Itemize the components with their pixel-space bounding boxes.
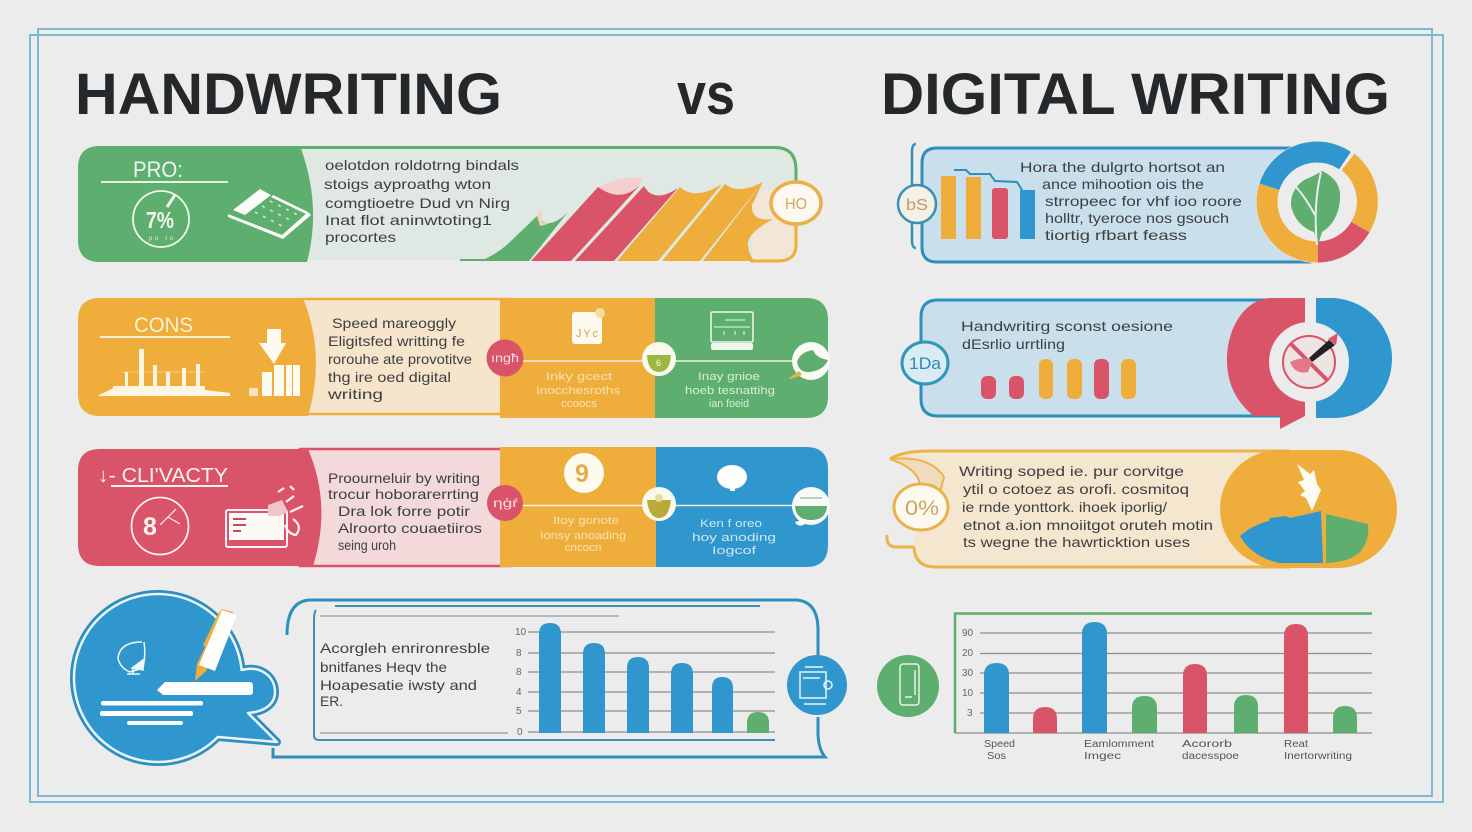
pros badge: HO xyxy=(785,196,807,213)
panel: pros xyxy=(78,146,821,262)
digital cons badge: 1Da xyxy=(909,354,942,373)
connector lines xyxy=(520,360,800,362)
panel: summary xyxy=(78,447,830,567)
grid lines xyxy=(955,633,1372,733)
cons light panel xyxy=(300,299,510,414)
bar chart xyxy=(515,623,775,738)
digital summary text xyxy=(959,463,1213,550)
bubble body xyxy=(74,594,277,762)
digital pros text: tiortig rfbart feass xyxy=(1045,227,1187,243)
digital summary text: ytil o cotoez as orofi. cosmitoq xyxy=(963,481,1189,497)
pros rule xyxy=(101,181,228,183)
summary red node: ηģŕ xyxy=(493,496,518,510)
pros outline xyxy=(300,148,796,190)
panel: cons xyxy=(78,298,830,418)
icon: number nine: 9 xyxy=(575,460,589,488)
digital cons text xyxy=(961,318,1173,352)
mini bars xyxy=(941,170,1035,239)
digital summary outline xyxy=(887,451,1290,567)
cons leaf node xyxy=(789,342,830,380)
chart text: bnitfanes Heqv the xyxy=(320,659,447,675)
summary blue caption: Ken f oreo xyxy=(700,518,762,530)
digital pros text: ance mihootion ois the xyxy=(1042,176,1204,192)
donut chart xyxy=(1256,141,1378,263)
digital summary text: ie rnde yonttork. ihoek iporlig/ xyxy=(962,499,1167,515)
pros text: procortes xyxy=(325,229,396,245)
icon: percent dial xyxy=(133,191,189,247)
blue half ring xyxy=(1316,298,1392,418)
cons text: rorouhe ate provotitve xyxy=(328,351,472,367)
summary orange block xyxy=(500,447,660,567)
cons orange caption: ccoocs xyxy=(561,398,598,410)
summary text: Proourneluir by writing xyxy=(328,470,480,486)
icon: note card xyxy=(572,308,605,344)
cons red node: ıngħ xyxy=(491,351,519,365)
summary cup node xyxy=(792,487,830,526)
digital summary text: ts wegne the hawrticktion uses xyxy=(963,534,1190,550)
digital cons text: Handwritirg sconst oesione xyxy=(961,318,1173,334)
pros text: stoigs ayproathg wton xyxy=(324,176,491,192)
icon: laptop xyxy=(711,312,753,350)
summary text: Alroorto couaetiiros xyxy=(338,520,482,536)
panel: digital cons xyxy=(902,298,1392,429)
summary orange caption xyxy=(540,515,626,554)
icon: note card: JYc xyxy=(576,328,598,340)
icon: lightbulb sketch xyxy=(118,642,145,674)
summary text xyxy=(328,470,482,553)
chart text: Acorgleh enrironresble xyxy=(320,640,490,656)
cons orange caption xyxy=(536,371,621,410)
cons mid node: 6 xyxy=(656,358,661,368)
icon: island and feather xyxy=(1240,464,1368,563)
pros text xyxy=(324,157,519,245)
cons green caption: Inay gnioe xyxy=(698,371,760,383)
icon: number nine xyxy=(564,453,604,493)
digital cons badge xyxy=(902,342,948,384)
connector lines xyxy=(520,504,800,506)
digital summary badge xyxy=(894,484,948,530)
bar chart: 5 xyxy=(516,706,522,717)
cons text: thg ire oed digital xyxy=(328,369,451,385)
category labels: Imgec xyxy=(1084,750,1121,762)
cons text: Speed mareoggly xyxy=(332,315,456,331)
bar chart: 4 xyxy=(516,687,522,698)
icon: phone badge xyxy=(877,655,939,717)
cons orange caption: Inky gcect xyxy=(546,371,612,383)
digital summary badge: 0% xyxy=(905,497,939,520)
pros heading: PRO: xyxy=(133,157,183,182)
icon: monitor with splash xyxy=(226,486,303,547)
cons red node xyxy=(486,340,524,376)
mini bar chart xyxy=(981,359,1136,399)
category labels: Eamlomment xyxy=(1084,738,1154,750)
red half ring xyxy=(1227,298,1305,429)
axis labels: 20 xyxy=(962,648,974,659)
axis labels xyxy=(962,628,974,719)
badge: bS xyxy=(906,197,928,214)
digital cons text: dEsrlio urrtling xyxy=(962,336,1065,352)
pros text: comgtioetre Dud vn Nirg xyxy=(325,195,510,211)
outer frame xyxy=(273,600,825,757)
comparison bar chart xyxy=(955,614,1372,762)
badge xyxy=(898,185,936,223)
icon: down arrow and bars xyxy=(249,329,300,396)
cons text: Eligitsfed writting fe xyxy=(328,333,465,349)
pros background xyxy=(79,147,796,260)
digital cons panel xyxy=(921,300,1280,416)
cons rule xyxy=(100,336,230,338)
icon: score dial xyxy=(132,498,188,554)
category labels: Inertorwriting xyxy=(1284,750,1352,762)
summary orange caption: cncocn xyxy=(564,542,602,554)
bars xyxy=(984,622,1357,733)
pros wave graphic xyxy=(460,177,796,261)
icon: bubble xyxy=(717,465,747,491)
writing lines xyxy=(100,682,253,725)
title: vs xyxy=(677,62,735,127)
pros badge xyxy=(771,182,821,224)
cons green block xyxy=(655,298,828,418)
digital summary panel xyxy=(890,451,1290,567)
category labels: dacesspoe xyxy=(1182,750,1239,762)
summary blue caption xyxy=(692,518,776,557)
icon: skyline xyxy=(99,349,230,396)
curl xyxy=(890,458,944,492)
cons heading: CONS xyxy=(134,314,193,337)
bar chart: 10 xyxy=(515,627,527,638)
title xyxy=(75,62,1390,127)
digital summary text: Writing soped ie. pur corvitge xyxy=(959,463,1184,479)
axis labels: 90 xyxy=(962,628,974,639)
category labels: Sos xyxy=(987,750,1006,762)
pros text: oelotdon roldotrng bindals xyxy=(325,157,519,173)
summary heading: ↓- CLI'VACTY xyxy=(98,465,228,487)
digital pros text: Hora the dulgrto hortsot an xyxy=(1020,159,1225,175)
axis labels: 10 xyxy=(962,688,974,699)
summary blue caption: hoy anoding xyxy=(692,532,776,544)
category labels xyxy=(984,738,1352,762)
chart frame xyxy=(955,614,1372,733)
icon: pen xyxy=(195,609,237,681)
category labels: Speed xyxy=(984,738,1015,750)
summary red node xyxy=(487,485,523,521)
summary text: seing uroh xyxy=(338,537,396,553)
cons text: writing xyxy=(327,386,383,402)
axis labels: 30 xyxy=(962,668,974,679)
inner rules xyxy=(320,616,619,733)
category labels: Reat xyxy=(1284,738,1308,750)
cons text xyxy=(327,315,472,402)
summary blue block xyxy=(656,447,828,567)
category labels: Acororb xyxy=(1182,738,1232,750)
summary light panel xyxy=(300,449,510,566)
cons green caption xyxy=(685,371,775,410)
summary red tab xyxy=(78,449,321,566)
summary rule xyxy=(111,485,228,487)
icon: percent dial: po to xyxy=(149,236,174,242)
digital summary text: etnot a.ion mnoiitgot oruteh motin xyxy=(963,517,1213,533)
digital pros text: holltr, tyeroce nos gsouch xyxy=(1045,210,1229,226)
cons green caption: hoeb tesnattihg xyxy=(685,385,775,397)
panel: digital summary xyxy=(887,450,1397,568)
bracket xyxy=(912,144,916,248)
panel: environment chart box xyxy=(273,600,847,757)
title: DIGITAL WRITING xyxy=(881,62,1390,127)
title: HANDWRITING xyxy=(75,62,502,127)
icon: leaf xyxy=(1291,171,1340,245)
chart text: ER. xyxy=(320,693,343,709)
digital pros text: strropeec for vhf ioo roore xyxy=(1045,193,1242,209)
inner frame xyxy=(314,606,775,740)
summary orange caption: Itoy gonote xyxy=(553,515,619,527)
icon: percent dial: 7% xyxy=(146,207,174,233)
cons mid node xyxy=(642,342,676,376)
digital pros text xyxy=(1020,159,1242,243)
pros text: Inat flot aninwtoting1 xyxy=(325,212,492,228)
summary mid node xyxy=(642,487,676,521)
summary blue caption: Iogcof xyxy=(712,545,757,557)
cons green caption: ian foeid xyxy=(709,398,749,410)
bar chart: 8 xyxy=(516,648,522,659)
chart text: Hoapesatie iwsty and xyxy=(320,677,477,693)
icon: no writing xyxy=(1269,322,1349,402)
axis labels: 3 xyxy=(967,708,973,719)
cons orange tab xyxy=(78,298,316,416)
pros green tab xyxy=(78,146,313,262)
icon: document badge xyxy=(787,655,847,715)
digital pros panel xyxy=(922,148,1310,262)
icon: score dial: 8 xyxy=(143,513,157,541)
panel: digital pros xyxy=(898,141,1378,263)
icon: calculator notebook xyxy=(228,189,311,239)
bar chart: 8 xyxy=(516,667,522,678)
summary orange caption: Ionsy anoading xyxy=(540,530,626,542)
summary text: Dra lok forre potir xyxy=(338,503,470,519)
cons orange caption: Inocchesroths xyxy=(536,385,621,397)
orange pill xyxy=(1220,450,1397,568)
chart text xyxy=(320,640,490,709)
summary text: trocur hoborarerrting xyxy=(328,486,479,502)
cons orange block xyxy=(500,298,660,418)
bar chart: 0 xyxy=(517,727,523,738)
panel: environmental impact speech bubble xyxy=(74,594,277,762)
